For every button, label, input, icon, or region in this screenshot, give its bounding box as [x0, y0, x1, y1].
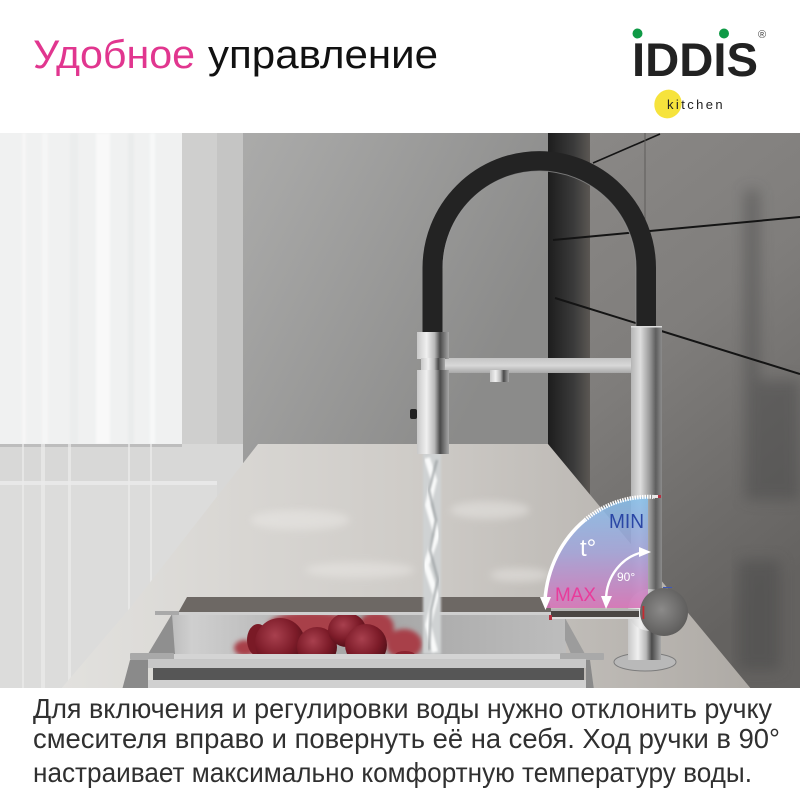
tap base	[628, 619, 661, 640]
min label: MIN	[609, 511, 644, 533]
description text: настраивает максимально комфортную температуру воды.	[33, 757, 752, 788]
countertop	[60, 444, 752, 690]
90 degree arrow bottom head	[601, 596, 612, 609]
ninety degrees label: 90°	[617, 570, 635, 584]
outer arc dashed	[585, 497, 655, 520]
top marker	[652, 495, 661, 498]
description text: смесителя вправо и повернуть её на себя. Ход ручки в 90°	[33, 723, 780, 754]
base stem	[628, 652, 661, 660]
round handle knob	[640, 588, 688, 636]
logo sub-brand: kitchen	[667, 97, 725, 112]
title	[33, 33, 438, 77]
lever handle	[551, 609, 639, 619]
sink front panel	[148, 659, 586, 668]
temperature dial	[540, 495, 688, 636]
title: управление	[208, 33, 438, 77]
lower window sill	[0, 444, 243, 496]
base ring	[614, 653, 676, 671]
registered mark: ®	[758, 29, 766, 41]
sink front rail	[344, 654, 560, 659]
faucet	[410, 161, 676, 671]
curtain side bands	[182, 133, 217, 444]
90 degree arrow	[606, 552, 644, 600]
max label: MAX	[555, 585, 596, 606]
right wall panels	[585, 133, 800, 688]
plums	[231, 615, 424, 654]
sink	[122, 611, 604, 690]
window behind curtain	[0, 133, 182, 444]
sink side frames	[148, 614, 175, 654]
outer arc solid	[545, 520, 585, 600]
dark recess panel	[548, 133, 590, 533]
kitchen photo illustration	[0, 133, 800, 694]
90 degree arrow top head	[639, 547, 651, 557]
sink back wall	[178, 597, 552, 613]
black flexible hose	[432, 161, 646, 334]
spray head body	[417, 370, 449, 454]
yellow blob	[650, 85, 686, 123]
water stream	[423, 453, 441, 654]
spray head neck	[421, 358, 445, 371]
column lower section	[631, 501, 662, 590]
logo wordmark: IDDIS	[632, 33, 758, 86]
logo green dots	[632, 28, 729, 38]
spray button	[410, 409, 417, 419]
bar knob	[490, 370, 509, 382]
main column	[631, 326, 662, 501]
max arrowhead	[540, 597, 551, 610]
sink interior	[172, 615, 541, 654]
temperature wedge	[545, 497, 648, 608]
grey wall	[243, 133, 548, 463]
brand logo	[632, 28, 766, 123]
curtain folds	[98, 134, 108, 442]
hose inner highlight	[443, 171, 636, 326]
title: Удобное	[33, 33, 195, 77]
horizontal bar	[440, 358, 635, 373]
lever tip markers	[549, 615, 552, 620]
description text: Для включения и регулировки воды нужно отклонить ручку	[33, 693, 772, 724]
marble veins	[250, 501, 550, 582]
knob blue mark	[663, 587, 672, 588]
sink back rail	[172, 612, 552, 615]
mixer body	[628, 589, 656, 631]
spray head collar	[417, 332, 449, 359]
panel seams	[553, 133, 800, 374]
reflection on right wall	[738, 190, 800, 670]
rail handles	[130, 611, 604, 660]
knob red mark	[642, 606, 644, 619]
temperature label: t°	[580, 535, 596, 562]
description text	[33, 693, 780, 788]
